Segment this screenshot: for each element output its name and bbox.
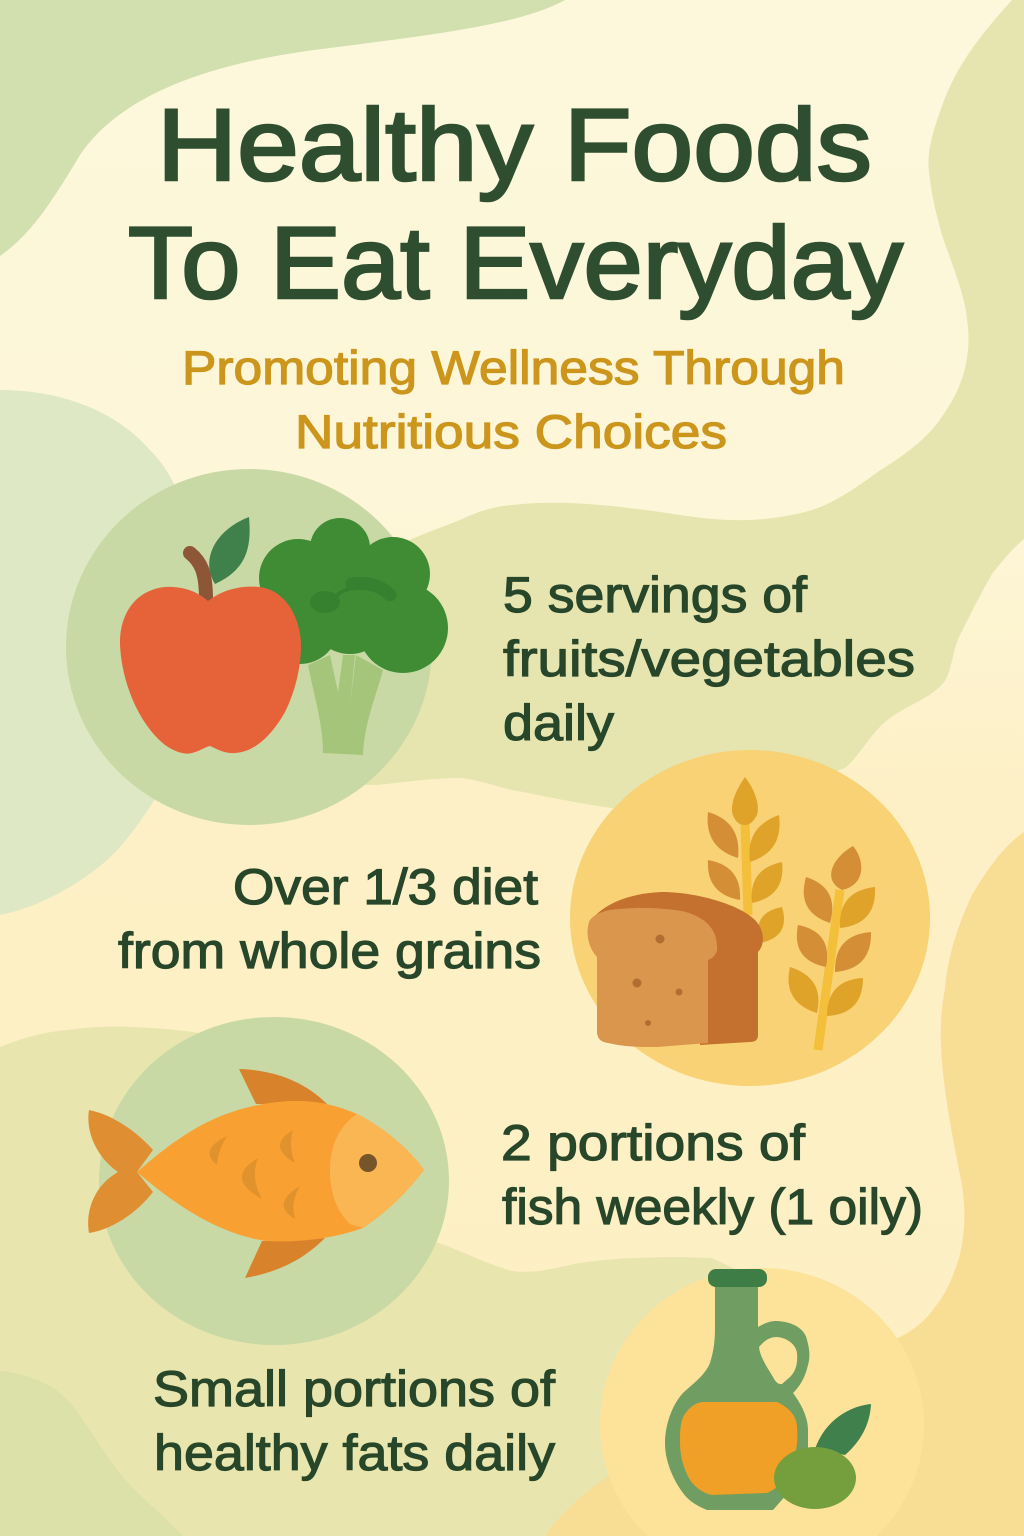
text: fish: 2 portions of (501, 1115, 805, 1171)
text: fish: fish weekly (1 oily) (502, 1179, 923, 1235)
icon circle: fruits and vegetables (66, 469, 432, 825)
title: Healthy Foods (157, 88, 872, 202)
icon: olive oil bottle (665, 1269, 809, 1510)
icon circle: fats (600, 1268, 924, 1536)
text: fruits and vegetables: fruits/vegetables (503, 631, 915, 687)
text: fruits and vegetables: daily (503, 695, 614, 751)
icon circle: grains (570, 750, 930, 1086)
icon: olive leaf (815, 1404, 871, 1455)
icon: apple leaf (209, 517, 250, 584)
title (128, 88, 903, 320)
text: whole grains: Over 1/3 diet (233, 859, 538, 915)
text: healthy fats (153, 1361, 555, 1481)
text: whole grains: from whole grains (118, 923, 541, 979)
icon: bread loaf (588, 892, 763, 1047)
icon: wheat stalk back (708, 777, 784, 943)
icon: apple (120, 587, 301, 754)
panel: healthy fats (600, 1268, 924, 1536)
icon: apple stem (190, 553, 206, 600)
icon circle: fish (99, 1017, 449, 1345)
icon: fish (88, 1069, 424, 1278)
icon: wheat stalk front (789, 846, 875, 1050)
panel: fruits and vegetables (66, 469, 448, 825)
text: fruits and vegetables (503, 567, 915, 751)
subtitle: Promoting Wellness Through (182, 341, 845, 394)
text: fruits and vegetables: 5 servings of (503, 567, 807, 623)
text: healthy fats: healthy fats daily (154, 1425, 555, 1481)
title: To Eat Everyday (128, 206, 903, 320)
subtitle: Nutritious Choices (295, 405, 727, 458)
icon: broccoli (259, 518, 448, 755)
text: healthy fats: Small portions of (153, 1361, 555, 1417)
subtitle (182, 341, 845, 458)
panel: whole grains (570, 750, 930, 1086)
icon: olive (774, 1447, 856, 1509)
panel: fish (88, 1017, 449, 1345)
text: whole grains (118, 859, 541, 979)
text: fish (501, 1115, 923, 1235)
